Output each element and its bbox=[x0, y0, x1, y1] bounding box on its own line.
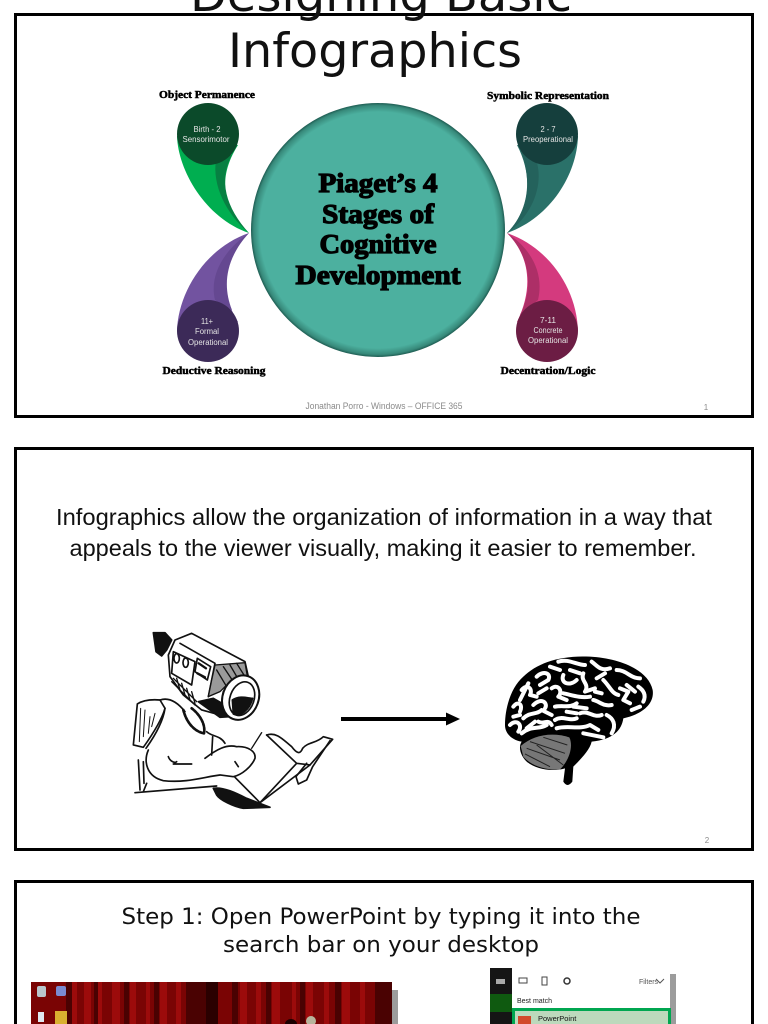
text block: step 1 instruction: search bar on your desktop bbox=[223, 933, 539, 958]
arrow bbox=[341, 712, 460, 726]
footer text: Jonathan Porro - Windows – OFFICE 365 bbox=[306, 401, 462, 411]
teardrop: Deductive Reasoning, 11+: Deductive Reasoning bbox=[162, 365, 266, 377]
search menu screenshot: Best match bbox=[517, 998, 552, 1005]
panel: slide 1 Piaget stages bbox=[16, 0, 752, 416]
central circle: Piaget's 4 Stages bbox=[251, 103, 505, 357]
panel: slide 3 step 1 bbox=[16, 882, 752, 1024]
teardrop: Object Permanence, Birth-2: Birth - 2 bbox=[194, 125, 221, 134]
search menu screenshot: Filters bbox=[639, 979, 659, 986]
icon: brain bbox=[505, 656, 653, 785]
teardrop: Deductive Reasoning, 11+: Formal bbox=[195, 327, 219, 336]
search menu screenshot bbox=[490, 968, 676, 1024]
icon: file shortcut bbox=[38, 1012, 44, 1022]
teardrop: Symbolic Representation, 2-7: 2 - 7 bbox=[540, 125, 556, 134]
teardrop: Object Permanence, Birth-2 bbox=[159, 89, 255, 233]
teardrop: Symbolic Representation, 2-7 bbox=[487, 90, 609, 233]
central circle: Piaget's 4 Stages: Cognitive bbox=[320, 229, 437, 259]
teardrop: Decentration/Logic, 7-11: 7-11 bbox=[540, 316, 557, 325]
figure head on stage bbox=[306, 1016, 316, 1024]
icon: camera-headed person reading bbox=[133, 633, 333, 808]
title: Infographics bbox=[228, 24, 522, 79]
central circle: Piaget's 4 Stages: Piaget’s 4 bbox=[318, 168, 438, 198]
text block: step 1 instruction bbox=[122, 905, 640, 958]
title bbox=[190, 0, 572, 79]
icon: yellow app shortcut bbox=[55, 1011, 67, 1024]
teardrop: Deductive Reasoning, 11+ bbox=[162, 233, 266, 377]
teardrop: Decentration/Logic, 7-11: Operational bbox=[528, 336, 568, 345]
teardrop: Decentration/Logic, 7-11: Decentration/Logic bbox=[500, 365, 596, 377]
text block: step 1 instruction: Step 1: Open PowerPoint by typing it into the bbox=[122, 905, 640, 930]
slide number: 2 bbox=[705, 836, 710, 845]
panel: slide 2 memory bbox=[16, 448, 752, 850]
text block: infographics definition: Infographics allow the organization of information in a way that bbox=[56, 504, 713, 530]
text block: infographics definition: appeals to the viewer visually, making it easier to remember. bbox=[70, 535, 697, 561]
icon: recycle bin bbox=[37, 986, 46, 997]
teardrop: Decentration/Logic, 7-11 bbox=[500, 233, 596, 377]
icon: discord shortcut bbox=[56, 986, 66, 996]
teardrop: Deductive Reasoning, 11+: Operational bbox=[188, 338, 228, 347]
teardrop: Object Permanence, Birth-2: Object Permanence bbox=[159, 89, 255, 101]
desktop screenshot: red curtain bbox=[31, 982, 398, 1024]
teardrop: Deductive Reasoning, 11+: 11+ bbox=[201, 317, 213, 326]
search menu screenshot: PowerPoint bbox=[538, 1014, 577, 1023]
teardrop: Object Permanence, Birth-2: Sensorimotor bbox=[182, 135, 230, 144]
teardrop: Symbolic Representation, 2-7: Symbolic Representation bbox=[487, 90, 609, 102]
teardrop: Decentration/Logic, 7-11: Concrete bbox=[534, 326, 563, 335]
central circle: Piaget's 4 Stages: Development bbox=[296, 260, 461, 290]
slide number: 1 bbox=[704, 403, 709, 412]
text block: infographics definition bbox=[56, 504, 713, 561]
central circle: Piaget's 4 Stages: Stages of bbox=[322, 199, 435, 229]
teardrop: Symbolic Representation, 2-7: Preoperational bbox=[523, 135, 573, 144]
